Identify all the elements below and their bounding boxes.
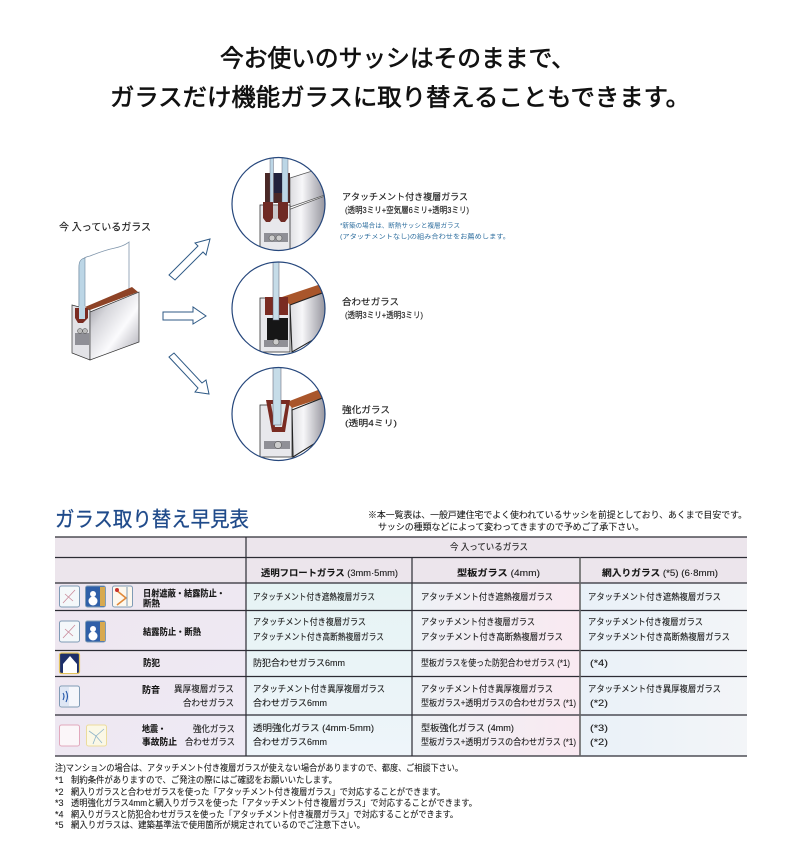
row: crime prevention: 防犯合わせガラス6mm [253, 657, 345, 668]
footnotes: 網入りガラスと合わせガラスを使った「アタッチメント付き複層ガラス」で対応することができます。 [71, 786, 445, 797]
note above table: サッシの種類などによって変わってきますので予めご了承下さい。 [378, 521, 644, 532]
caption: tempered glass [342, 404, 397, 428]
footnotes: *2 [55, 787, 64, 797]
row: crime prevention: (*4) [590, 658, 608, 668]
caption: double glazing: *新築の場合は、断熱サッシと複層ガラス [340, 220, 460, 230]
table header: 網入りガラス (*5) (6·8mm) [602, 567, 718, 578]
row: solar shading, condensation, insulation: アタッチメント付き遮熱複層ガラス [421, 591, 553, 602]
icon: sound [60, 686, 80, 707]
icon: sun small [60, 621, 80, 642]
circle: tempered glass detail [231, 366, 326, 462]
row: earthquake and accident prevention: (*3) [590, 723, 608, 733]
row: solar shading, condensation, insulation [60, 586, 721, 608]
row: earthquake and accident prevention: 透明強化ガラス (4mm·5mm) [253, 722, 374, 733]
table header: 型板ガラス (4mm) [457, 567, 540, 578]
row: condensation, insulation: アタッチメント付き複層ガラス [588, 616, 703, 627]
row: earthquake and accident prevention: 合わせガラス6mm [253, 736, 327, 747]
icon: tempered pane [60, 725, 80, 746]
caption: laminated glass [342, 296, 423, 320]
illustration: current sash [72, 242, 139, 360]
row: sound insulation: 合わせガラス [183, 697, 234, 708]
footnotes: 制約条件がありますので、ご発注の際にはご確認をお願いいたします。 [71, 774, 337, 785]
row: condensation, insulation: アタッチメント付き高断熱複層ガラス [588, 631, 730, 642]
row: condensation, insulation: アタッチメント付き高断熱複層ガラス [421, 631, 563, 642]
row: condensation, insulation [60, 616, 730, 642]
caption: double glazing [340, 191, 510, 240]
row: earthquake and accident prevention [60, 722, 608, 747]
row: sound insulation: アタッチメント付き異厚複層ガラス [421, 683, 553, 694]
row: sound insulation: (*2) [590, 698, 608, 708]
circle: double glazing detail [231, 156, 326, 252]
row: earthquake and accident prevention: 型板ガラス+透明ガラスの合わせガラス (*1) [421, 736, 576, 747]
caption: double glazing: (アタッチメントなし)の組み合わせをお薦めします。 [340, 232, 510, 240]
row: crime prevention: 防犯 [143, 657, 160, 668]
row: earthquake and accident prevention: 事故防止 [142, 736, 177, 747]
row: solar shading, condensation, insulation: 日射遮蔽・結露防止・ [143, 588, 225, 598]
row: earthquake and accident prevention: 地震・ [142, 723, 166, 734]
caption: laminated glass: 合わせガラス [342, 296, 399, 307]
footnotes: *1 [55, 775, 64, 785]
row: sound insulation: 異厚複層ガラス [174, 683, 234, 694]
title: 今お使いのサッシはそのままで、 [220, 46, 575, 72]
row: sound insulation: アタッチメント付き異厚複層ガラス [253, 683, 385, 694]
caption: double glazing: (透明3ミリ+空気層6ミリ+透明3ミリ) [345, 205, 469, 215]
row: sound insulation: 合わせガラス6mm [253, 697, 327, 708]
row: condensation, insulation: アタッチメント付き複層ガラス [253, 616, 366, 627]
title: ガラスだけ機能ガラスに取り替えることもできます。 [110, 84, 690, 112]
icon: snowman [86, 586, 106, 607]
footnotes: *3 [55, 798, 64, 808]
icon: sun [60, 586, 80, 607]
row: sound insulation: アタッチメント付き異厚複層ガラス [588, 683, 721, 694]
row: sound insulation: 型板ガラス+透明ガラスの合わせガラス (*1) [421, 697, 576, 708]
icon: laminated crack [86, 725, 106, 746]
footnotes: *5 [55, 820, 64, 830]
title [110, 46, 690, 112]
row: sound insulation [60, 683, 721, 708]
row: condensation, insulation: アタッチメント付き複層ガラス [421, 616, 535, 627]
heading: quick reference table: ガラス取り替え早見表 [55, 508, 249, 532]
footnotes [55, 762, 477, 830]
footnotes: 注)マンションの場合は、アタッチメント付き複層ガラスが使えない場合がありますので、都度、ご相談下さい。 [55, 762, 463, 773]
caption: double glazing: アタッチメント付き複層ガラス [342, 191, 468, 202]
footnotes: 網入りガラスは、建築基準法で使用箇所が規定されているのでご注意下さい。 [71, 819, 365, 830]
arrow: up-right [169, 239, 210, 280]
note above table: ※本一覧表は、一般戸建住宅でよく使われているサッシを前提としており、あくまで目安です。 [368, 509, 747, 520]
row: earthquake and accident prevention: 強化ガラス [193, 723, 235, 734]
footnotes: 透明強化ガラス4mmと網入りガラスを使った「アタッチメント付き複層ガラス」で対応することができます。 [71, 797, 477, 808]
footnotes: *4 [55, 810, 64, 820]
caption: laminated glass: (透明3ミリ+透明3ミリ) [345, 310, 423, 320]
row: solar shading, condensation, insulation: アタッチメント付き遮熱複層ガラス [253, 591, 375, 602]
arrow: right [163, 307, 206, 324]
icon: snowman small [86, 621, 106, 642]
row: solar shading, condensation, insulation: 断熱 [143, 598, 160, 608]
row: earthquake and accident prevention: 型板強化ガラス (4mm) [421, 722, 514, 733]
row: crime prevention [60, 653, 608, 674]
row: condensation, insulation: アタッチメント付き高断熱複層ガラス [253, 631, 384, 642]
row: earthquake and accident prevention: (*2) [590, 737, 608, 747]
caption: tempered glass: 強化ガラス [342, 404, 390, 415]
footnotes: 網入りガラスと防犯合わせガラスを使った「アタッチメント付き複層ガラス」で対応することができます。 [71, 808, 458, 820]
table header: 今 入っているガラス [450, 541, 528, 552]
row: sound insulation: 防音 [142, 684, 160, 695]
row: solar shading, condensation, insulation: アタッチメント付き遮熱複層ガラス [588, 591, 721, 602]
note above table [368, 509, 747, 532]
arrow: down-right [169, 353, 209, 394]
table header [261, 541, 718, 578]
caption: tempered glass: (透明4ミリ) [345, 418, 397, 428]
row: crime prevention: 型板ガラスを使った防犯合わせガラス (*1) [421, 657, 570, 668]
circle: laminated glass detail [231, 261, 326, 356]
table header: 透明フロートガラス (3mm·5mm) [261, 567, 398, 578]
icon: heat [112, 586, 132, 607]
label: current glass: 今 入っているガラス [59, 220, 151, 234]
icon: crime prevention [60, 653, 80, 674]
row: earthquake and accident prevention: 合わせガラス [185, 736, 235, 747]
table backgrounds [55, 537, 747, 756]
row: condensation, insulation: 結露防止・断熱 [143, 626, 201, 637]
table [55, 537, 747, 756]
